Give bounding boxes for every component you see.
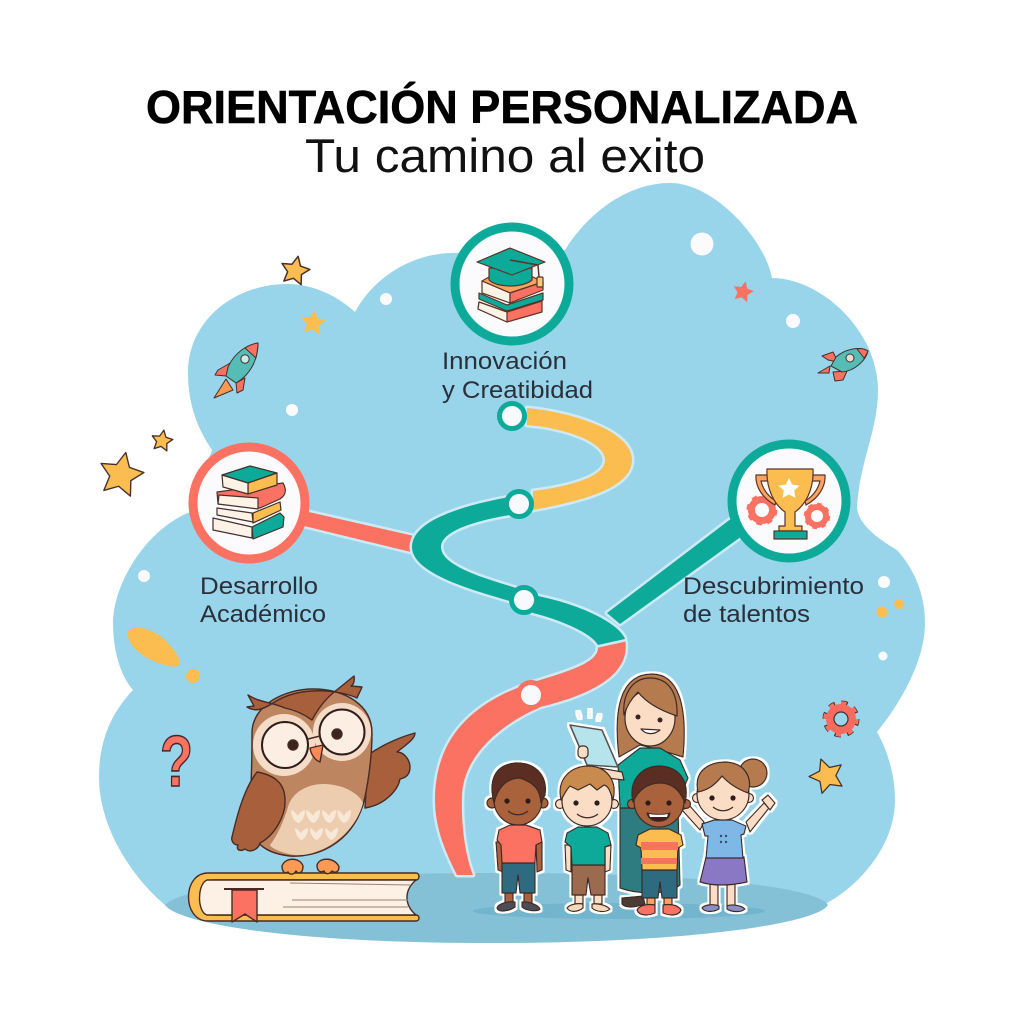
icon: rocket right (818, 349, 868, 381)
children shadow (473, 903, 765, 919)
path: coral lower segment (435, 639, 626, 875)
icon: gear (826, 704, 856, 734)
label: talent discovery: Descubrimiento (683, 573, 864, 600)
subtitle: Tu camino al exito (305, 129, 705, 182)
path node: second (506, 492, 532, 516)
label: academic development (200, 573, 326, 628)
label: talent discovery (683, 573, 864, 628)
book (188, 873, 419, 922)
badge: academic development (193, 447, 326, 628)
owl glasses (262, 710, 364, 768)
owl feet (282, 859, 339, 874)
label: innovation: y Creatibidad (442, 377, 593, 404)
icon: orange dots (186, 599, 904, 683)
icon: stars (96, 253, 848, 796)
path: yellow top segment (527, 408, 632, 510)
label: talent discovery: de talentos (683, 601, 810, 628)
teacher (570, 674, 688, 907)
label: innovation (442, 348, 593, 404)
owl feathers (291, 810, 351, 840)
path: teal branch to talents (607, 518, 742, 624)
icon: stack of books (213, 466, 285, 539)
title: ORIENTACIÓN PERSONALIZADA (146, 81, 858, 133)
path: teal middle segment (412, 497, 625, 645)
icon: gears (749, 497, 828, 527)
icon: white dots (138, 232, 890, 660)
label: innovation: Innovación (442, 348, 567, 375)
path node: third (512, 588, 536, 612)
icon: books with graduation cap (477, 248, 545, 322)
label: academic development: Académico (200, 601, 326, 628)
icon: rocket left (214, 343, 258, 398)
boy with teal shirt (556, 766, 618, 912)
girl with blue blouse (682, 759, 775, 912)
boy with coral shirt (487, 763, 548, 911)
illustration: owl on book (188, 676, 419, 922)
owl eye patches (253, 714, 315, 776)
path node: fourth (518, 682, 544, 708)
ground ellipse (165, 873, 828, 943)
badge: innovation (442, 227, 593, 404)
owl wing left (232, 772, 285, 851)
owl belly (270, 784, 363, 855)
owl beak (310, 745, 323, 762)
badge: talent discovery (683, 444, 864, 628)
icon: question mark: ? (160, 722, 193, 802)
label: academic development: Desarrollo (200, 573, 318, 600)
illustration: teacher and children (487, 674, 775, 915)
path node: top (500, 404, 524, 428)
icon: trophy (756, 469, 825, 539)
boy with striped shirt (628, 766, 690, 915)
icon: exclamation streak (128, 628, 180, 667)
owl body (249, 689, 372, 856)
owl wing right raised (365, 733, 415, 808)
owl brow and ear tufts (247, 676, 362, 720)
path: coral branch to academic (300, 510, 414, 552)
cloud background (99, 183, 925, 943)
winding path (300, 408, 742, 875)
